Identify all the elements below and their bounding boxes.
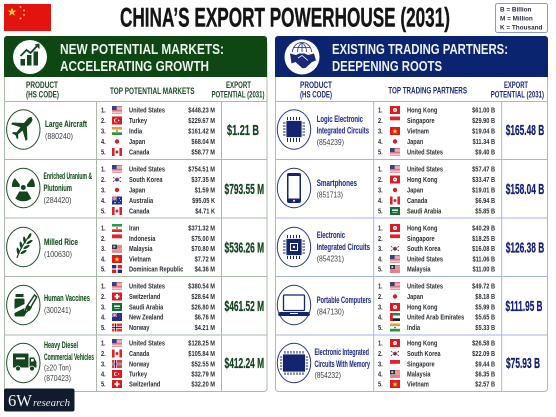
partners list: 4. bbox=[378, 139, 383, 146]
markets list: 5. bbox=[101, 208, 106, 216]
partners list: Hong Kong bbox=[407, 107, 438, 115]
product label: Plutonium bbox=[44, 183, 72, 193]
partners list: 4. bbox=[378, 371, 383, 379]
partners list: 3. bbox=[378, 187, 383, 195]
markets list: United States bbox=[129, 283, 166, 291]
partners list: $61.00 B bbox=[472, 107, 495, 115]
partners list: 4. bbox=[378, 256, 383, 264]
column headers: PRODUCT bbox=[300, 80, 332, 90]
icon: handshake globe bbox=[284, 40, 320, 74]
partners list: $11.34 B bbox=[472, 139, 495, 146]
partners list bbox=[378, 224, 495, 274]
column headers: PRODUCT bbox=[26, 80, 58, 90]
markets list: India bbox=[129, 128, 143, 136]
partners list: 2. bbox=[378, 351, 383, 358]
markets list: 1. bbox=[101, 107, 106, 115]
markets list: $229.67 M bbox=[188, 118, 215, 125]
product label bbox=[44, 171, 92, 205]
partners list bbox=[378, 282, 495, 332]
markets list: $4.71 K bbox=[195, 208, 215, 216]
partners list: $19.01 B bbox=[472, 187, 495, 195]
markets list: Norway bbox=[129, 325, 150, 332]
markets list: 2. bbox=[101, 177, 106, 184]
partners list: 5. bbox=[378, 381, 383, 389]
partners list: 4. bbox=[378, 314, 383, 322]
partners list: $5.99 B bbox=[475, 304, 495, 312]
markets list: Australia bbox=[129, 198, 154, 205]
column headers: (HS CODE) bbox=[26, 90, 59, 100]
markets list: 1. bbox=[101, 166, 106, 174]
markets list: United States bbox=[129, 166, 166, 174]
header banner bbox=[275, 36, 548, 77]
product label: Milled Rice bbox=[44, 237, 78, 247]
product label: Electronic Integrated bbox=[314, 347, 369, 357]
product label: (851713) bbox=[317, 190, 343, 200]
partners list: $29.90 B bbox=[472, 118, 495, 125]
partners list: South Korea bbox=[407, 246, 441, 253]
partners list: 4. bbox=[378, 198, 383, 205]
column headers: (HS CODE) bbox=[300, 90, 332, 100]
partners list: 3. bbox=[378, 128, 383, 136]
legend: units: B = Billion bbox=[500, 6, 532, 14]
markets list: $6.76 M bbox=[195, 314, 215, 322]
markets list: 3. bbox=[101, 361, 106, 369]
partners list: $6.35 B bbox=[475, 371, 495, 379]
product label bbox=[317, 230, 370, 264]
markets list: Iran bbox=[129, 225, 139, 233]
export value: $536.26 M bbox=[225, 240, 264, 256]
partners list: United Arab Emirates bbox=[407, 314, 465, 322]
partners list: 2. bbox=[378, 294, 383, 301]
markets list: Turkey bbox=[129, 371, 148, 379]
markets list: 4. bbox=[101, 371, 106, 379]
partners list: Japan bbox=[407, 187, 423, 195]
product label: Integrated Circuits bbox=[317, 126, 369, 136]
table frame bbox=[276, 40, 548, 392]
markets list: New Zealand bbox=[129, 314, 164, 322]
partners list: 1. bbox=[378, 166, 383, 174]
row: electronic circuits bbox=[277, 224, 544, 274]
markets list: Saudi Arabia bbox=[129, 304, 164, 312]
markets list: $1.59 M bbox=[195, 187, 215, 195]
markets list: $380.54 M bbox=[188, 283, 215, 291]
markets list: United States bbox=[129, 107, 166, 115]
markets list: 5. bbox=[101, 149, 106, 157]
markets list: $448.23 M bbox=[188, 107, 215, 115]
markets list: 2. bbox=[101, 351, 106, 358]
markets list: 2. bbox=[101, 118, 106, 125]
partners list: 1. bbox=[378, 225, 383, 233]
markets list bbox=[101, 165, 215, 216]
heading: ACCELERATING GROWTH bbox=[60, 59, 209, 75]
markets list: $26.80 M bbox=[191, 304, 215, 312]
icon: growth chart bbox=[13, 40, 47, 74]
markets list: $32.20 M bbox=[191, 381, 215, 389]
column headers bbox=[300, 80, 544, 100]
markets list: $161.42 M bbox=[188, 128, 215, 136]
product label: (300241) bbox=[44, 305, 71, 315]
markets list: Canada bbox=[129, 208, 150, 216]
markets list bbox=[101, 106, 215, 157]
partners list: Singapore bbox=[407, 118, 435, 125]
markets list: 5. bbox=[101, 325, 106, 332]
partners list bbox=[378, 165, 495, 216]
heading: EXISTING TRADING PARTNERS: bbox=[332, 42, 508, 58]
icon: wheat bbox=[7, 227, 40, 267]
table frame bbox=[4, 40, 267, 392]
panel: new potential markets bbox=[4, 36, 267, 392]
partners list: 5. bbox=[378, 266, 383, 274]
export value: $461.52 M bbox=[225, 299, 264, 315]
row: human vaccines bbox=[7, 282, 264, 332]
markets list: 5. bbox=[101, 381, 106, 389]
icon: vaccine bbox=[7, 285, 40, 325]
product label bbox=[44, 237, 78, 259]
partners list: 2. bbox=[378, 118, 383, 125]
row: memory circuits bbox=[277, 339, 540, 389]
product label: Large Aircraft bbox=[45, 119, 87, 129]
icon: phone bbox=[277, 168, 311, 208]
partners list: $22.09 B bbox=[472, 351, 495, 358]
legend: units bbox=[496, 4, 548, 32]
icon: plane bbox=[7, 110, 40, 149]
markets list: 1. bbox=[101, 283, 106, 291]
product label: Smartphones bbox=[317, 178, 357, 188]
markets list: Norway bbox=[129, 361, 150, 369]
product label: (854239) bbox=[317, 137, 344, 147]
partners list: 5. bbox=[378, 325, 383, 332]
markets list bbox=[101, 224, 215, 274]
partners list: $5.85 B bbox=[475, 208, 495, 216]
markets list: Vietnam bbox=[129, 256, 151, 264]
partners list: 5. bbox=[378, 149, 383, 157]
product label bbox=[44, 293, 90, 315]
markets list: $52.55 M bbox=[191, 361, 215, 369]
markets list: 3. bbox=[101, 304, 106, 312]
export value: $1.21 B bbox=[227, 123, 259, 139]
china flag bbox=[4, 4, 51, 31]
logo: 6W research: 6W bbox=[8, 391, 33, 410]
partners list: $2.57 B bbox=[475, 381, 495, 389]
markets list: $105.84 M bbox=[188, 351, 215, 358]
icon: radiation bbox=[7, 168, 40, 208]
logo: 6W research: research bbox=[33, 398, 70, 409]
product label: Integrated Circuits bbox=[317, 242, 370, 252]
markets list: Turkey bbox=[129, 118, 148, 125]
product label bbox=[45, 119, 87, 141]
partners list: Singapore bbox=[407, 235, 435, 243]
markets list: $32.79 M bbox=[191, 371, 215, 379]
partners list: 3. bbox=[378, 361, 383, 369]
partners list bbox=[378, 339, 495, 389]
partners list: 1. bbox=[378, 340, 383, 348]
logo: 6W research bbox=[4, 388, 74, 412]
row: logic circuits bbox=[277, 106, 544, 157]
partners list: South Korea bbox=[407, 351, 441, 358]
partners list: Malaysia bbox=[407, 371, 431, 379]
markets list: $4.21 M bbox=[195, 325, 215, 332]
partners list: India bbox=[407, 325, 421, 332]
markets list: 3. bbox=[101, 246, 106, 253]
legend: units: K = Thousand bbox=[500, 24, 543, 32]
markets list: $75.00 M bbox=[191, 235, 215, 243]
column headers: POTENTIAL (2031) bbox=[212, 90, 264, 100]
icon: memory chip bbox=[277, 343, 311, 383]
export value: $793.55 M bbox=[225, 182, 264, 198]
row: smartphones bbox=[277, 165, 544, 216]
partners list: $6.94 B bbox=[475, 198, 495, 205]
partners list: 2. bbox=[378, 235, 383, 243]
product label: (870423) bbox=[44, 373, 71, 383]
partners list: $19.04 B bbox=[472, 128, 495, 136]
markets list: 3. bbox=[101, 128, 106, 136]
markets list: Dominican Republic bbox=[129, 266, 184, 274]
partners list: Hong Kong bbox=[407, 304, 438, 312]
column headers: EXPORT bbox=[504, 80, 528, 90]
markets list: $37.35 M bbox=[191, 177, 215, 184]
partners list bbox=[378, 106, 495, 157]
product label: Electronic bbox=[317, 230, 345, 240]
product label: (284420) bbox=[44, 195, 72, 205]
partners list: Vietnam bbox=[407, 381, 429, 389]
product label: (≥20 Ton) bbox=[44, 362, 71, 372]
markets list: $371.32 M bbox=[188, 225, 215, 233]
partners list: $16.08 B bbox=[472, 246, 495, 253]
product label: (880240) bbox=[45, 131, 73, 141]
product label: Circuits With Memory bbox=[314, 359, 370, 369]
markets list: Japan bbox=[129, 139, 145, 146]
partners list: 2. bbox=[378, 177, 383, 184]
partners list: Japan bbox=[407, 139, 423, 146]
column headers: TOP POTENTIAL MARKETS bbox=[110, 86, 194, 96]
product label: Human Vaccines bbox=[44, 293, 90, 303]
markets list: Canada bbox=[129, 351, 150, 358]
partners list: $18.25 B bbox=[472, 235, 495, 243]
product label bbox=[317, 295, 371, 316]
partners list: 3. bbox=[378, 246, 383, 253]
markets list: Indonesia bbox=[129, 235, 156, 243]
heading: NEW POTENTIAL MARKETS: bbox=[60, 42, 224, 58]
column headers: EXPORT bbox=[226, 80, 251, 90]
row: milled rice bbox=[7, 224, 264, 274]
heading bbox=[60, 42, 224, 75]
panel: existing trading partners bbox=[275, 36, 548, 392]
partners list: Vietnam bbox=[407, 128, 429, 136]
partners list: $9.44 B bbox=[475, 361, 495, 369]
markets list: $754.51 M bbox=[188, 166, 215, 174]
partners list: Hong Kong bbox=[407, 225, 438, 233]
markets list: Malaysia bbox=[129, 246, 153, 253]
markets list: 4. bbox=[101, 139, 106, 146]
partners list: $26.58 B bbox=[472, 340, 495, 348]
product label bbox=[314, 347, 370, 380]
partners list: Hong Kong bbox=[407, 177, 438, 184]
markets list: $68.04 M bbox=[191, 139, 215, 146]
product label: (100630) bbox=[44, 249, 72, 259]
partners list: $5.65 B bbox=[475, 314, 495, 322]
partners list: $8.18 B bbox=[475, 294, 495, 301]
markets list: 4. bbox=[101, 256, 106, 264]
markets list: Switzerland bbox=[129, 294, 161, 301]
markets list: $7.72 M bbox=[195, 256, 215, 264]
partners list: Japan bbox=[407, 294, 423, 301]
markets list: South Korea bbox=[129, 177, 163, 184]
partners list: $9.40 B bbox=[475, 149, 495, 157]
product label: (854232) bbox=[314, 370, 341, 380]
partners list: $33.47 B bbox=[472, 177, 495, 184]
icon: truck bbox=[7, 343, 40, 383]
markets list: 5. bbox=[101, 266, 106, 274]
partners list: United States bbox=[407, 166, 444, 174]
heading: DEEPENING ROOTS bbox=[332, 59, 442, 75]
product label: (854231) bbox=[317, 254, 344, 264]
product label: Heavy Diesel bbox=[44, 340, 78, 350]
partners list: Hong Kong bbox=[407, 340, 438, 348]
markets list: $4.36 M bbox=[195, 266, 215, 274]
header banner bbox=[4, 36, 267, 77]
markets list: 4. bbox=[101, 198, 106, 205]
markets list: Canada bbox=[129, 149, 150, 157]
row: large aircraft bbox=[7, 106, 259, 157]
partners list: United States bbox=[407, 149, 444, 157]
markets list: Switzerland bbox=[129, 381, 161, 389]
row: portable computers bbox=[277, 282, 542, 332]
markets list: United States bbox=[129, 340, 166, 348]
product label: Logic Electronic bbox=[317, 114, 363, 124]
heading bbox=[332, 42, 508, 75]
partners list: 1. bbox=[378, 283, 383, 291]
markets list: 2. bbox=[101, 235, 106, 243]
markets list: 1. bbox=[101, 225, 106, 233]
markets list: 4. bbox=[101, 314, 106, 322]
row: heavy diesel vehicles bbox=[7, 339, 264, 389]
icon: laptop bbox=[277, 285, 311, 325]
markets list: 2. bbox=[101, 294, 106, 301]
markets list: $28.64 M bbox=[191, 294, 215, 301]
partners list: $49.72 B bbox=[472, 283, 495, 291]
partners list: United States bbox=[407, 256, 444, 264]
icon: chip bbox=[277, 110, 311, 149]
product label: Commercial Vehicles bbox=[44, 352, 94, 362]
export value: $412.24 M bbox=[225, 356, 264, 372]
partners list: $40.29 B bbox=[472, 225, 495, 233]
partners list: $11.06 B bbox=[472, 256, 495, 264]
markets list: $95.05 K bbox=[192, 198, 215, 205]
icon: chip with core bbox=[277, 227, 311, 267]
partners list: $57.47 B bbox=[472, 166, 495, 174]
partners list: 3. bbox=[378, 304, 383, 312]
markets list: Japan bbox=[129, 187, 145, 195]
partners list: Saudi Arabia bbox=[407, 208, 442, 216]
product label bbox=[317, 114, 369, 147]
product label bbox=[44, 340, 94, 383]
column headers bbox=[26, 80, 264, 100]
partners list: 5. bbox=[378, 208, 383, 216]
partners list: $5.33 B bbox=[475, 325, 495, 332]
partners list: United States bbox=[407, 283, 444, 291]
markets list bbox=[101, 282, 215, 332]
partners list: $11.00 B bbox=[472, 266, 495, 274]
markets list: 3. bbox=[101, 187, 106, 195]
markets list: $70.80 M bbox=[191, 246, 215, 253]
row: enriched uranium bbox=[7, 165, 264, 216]
column headers: TOP TRADING PARTNERS bbox=[388, 86, 467, 96]
markets list: 1. bbox=[101, 340, 106, 348]
partners list: Malaysia bbox=[407, 266, 431, 274]
product label bbox=[317, 178, 357, 200]
legend: units: M = Million bbox=[500, 16, 533, 22]
markets list: $58.77 M bbox=[191, 149, 215, 157]
markets list: $128.25 M bbox=[188, 340, 215, 348]
partners list: Singapore bbox=[407, 361, 435, 369]
partners list: 1. bbox=[378, 107, 383, 115]
product label: Enriched Uranium & bbox=[44, 171, 92, 181]
markets list bbox=[101, 339, 215, 389]
product label: Portable Computers bbox=[317, 295, 371, 305]
partners list: Canada bbox=[407, 198, 428, 205]
product label: (847130) bbox=[317, 306, 344, 316]
